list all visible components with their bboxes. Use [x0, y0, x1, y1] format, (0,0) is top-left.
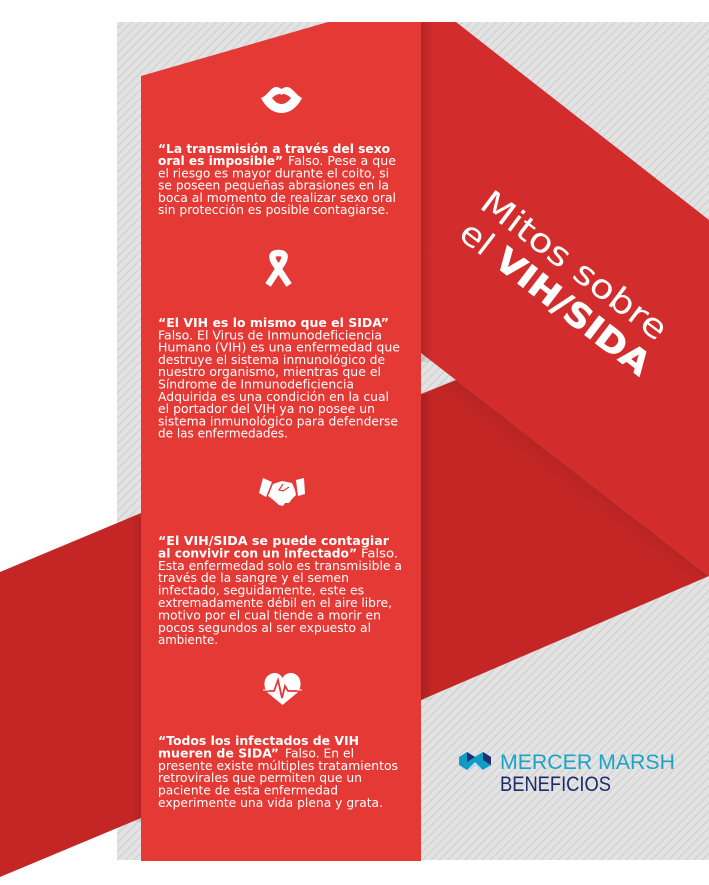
text block: myth 1: Falso. Pese a que	[288, 154, 396, 168]
text block: myth 1: boca al momento de realizar sexo oral	[158, 191, 396, 205]
text block: myth 2: Humano (VIH) es una enfermedad que	[158, 341, 400, 355]
text block: myth 4: experimente una vida plena y grata.	[158, 796, 383, 810]
text block: myth 1: oral es imposible”	[158, 154, 283, 168]
text block: myth 4: mueren de SIDA”	[158, 746, 279, 760]
upper ribbon band	[421, 22, 709, 576]
icon: heart with pulse	[263, 673, 302, 705]
text block: myth 2: de las enfermedades.	[158, 427, 288, 441]
lower dark ribbon band	[0, 380, 709, 877]
text block: myth 3: ambiente.	[158, 633, 218, 647]
panel: main red column	[141, 22, 421, 861]
text block: myth 3: extremadamente débil en el aire libre,	[158, 596, 392, 610]
icon: awareness ribbon	[268, 253, 289, 285]
text block: myth 2	[158, 316, 400, 441]
text block: myth 4: retrovirales que permiten que un	[158, 771, 362, 785]
text block: myth 1: se poseen pequeñas abrasiones en la	[158, 179, 389, 193]
text block: myth 3: “El VIH/SIDA se puede contagiar	[158, 534, 390, 548]
text block: myth 3	[158, 534, 402, 647]
text block: myth 2: Falso. El Virus de Inmunodeficiencia	[158, 328, 382, 342]
text block: myth 4: presente existe múltiples tratamientos	[158, 759, 398, 773]
text block: myth 3: motivo por el cual tiende a morir en	[158, 608, 381, 622]
text block: myth 4: paciente de esta enfermedad	[158, 784, 338, 798]
text block: myth 1: el riesgo es mayor durante el coito, si	[158, 166, 389, 180]
title: Mitos sobre el VIH/SIDA: el VIH/SIDA	[452, 212, 659, 384]
text block: myth 3: pocos segundos al ser expuesto al	[158, 621, 371, 635]
icon: logo mark	[459, 752, 491, 770]
title: Mitos sobre el VIH/SIDA	[452, 182, 676, 384]
logo: Mercer Marsh Beneficios: MERCER MARSH	[500, 751, 675, 774]
text block: myth 2: “El VIH es lo mismo que el SIDA”	[158, 316, 389, 330]
text block: myth 4: Falso. En el	[285, 746, 354, 760]
text block: myth 3: Esta enfermedad solo es transmisible a	[158, 559, 402, 573]
text block: myth 4	[158, 734, 398, 810]
text block: myth 3: Falso.	[361, 546, 398, 560]
text block: myth 1	[158, 142, 396, 217]
text block: myth 3: infectado, seguidamente, este es	[158, 584, 364, 598]
text block: myth 2: nuestro organismo, mientras que el	[158, 365, 381, 379]
text block: myth 4: “Todos los infectados de VIH	[158, 734, 359, 748]
text block: myth 2: Síndrome de Inmunodeficiencia	[158, 378, 354, 392]
text block: myth 2: destruye el sistema inmunológico de	[158, 353, 385, 367]
text block: myth 1: “La transmisión a través del sexo	[158, 142, 390, 156]
title: Mitos sobre el VIH/SIDA: Mitos sobre	[473, 182, 676, 348]
column shadow	[421, 22, 433, 362]
text block: myth 1: sin protección es posible contagiarse.	[158, 203, 389, 217]
text block: myth 2: sistema inmunológico para defenderse	[158, 414, 398, 428]
text block: myth 2: el portador del VIH ya no posee un	[158, 402, 375, 416]
icon: handshake	[259, 478, 305, 506]
icon: lips	[261, 87, 302, 113]
logo: Mercer Marsh Beneficios: BENEFICIOS	[500, 773, 611, 796]
panel: striped grey background	[117, 22, 709, 860]
text block: myth 3: través de la sangre y el semen	[158, 571, 349, 585]
text block: myth 3: al convivir con un infectado”	[158, 546, 357, 560]
logo: Mercer Marsh Beneficios	[459, 751, 675, 796]
text block: myth 2: Adquirida es una condición en la cual	[158, 390, 389, 404]
